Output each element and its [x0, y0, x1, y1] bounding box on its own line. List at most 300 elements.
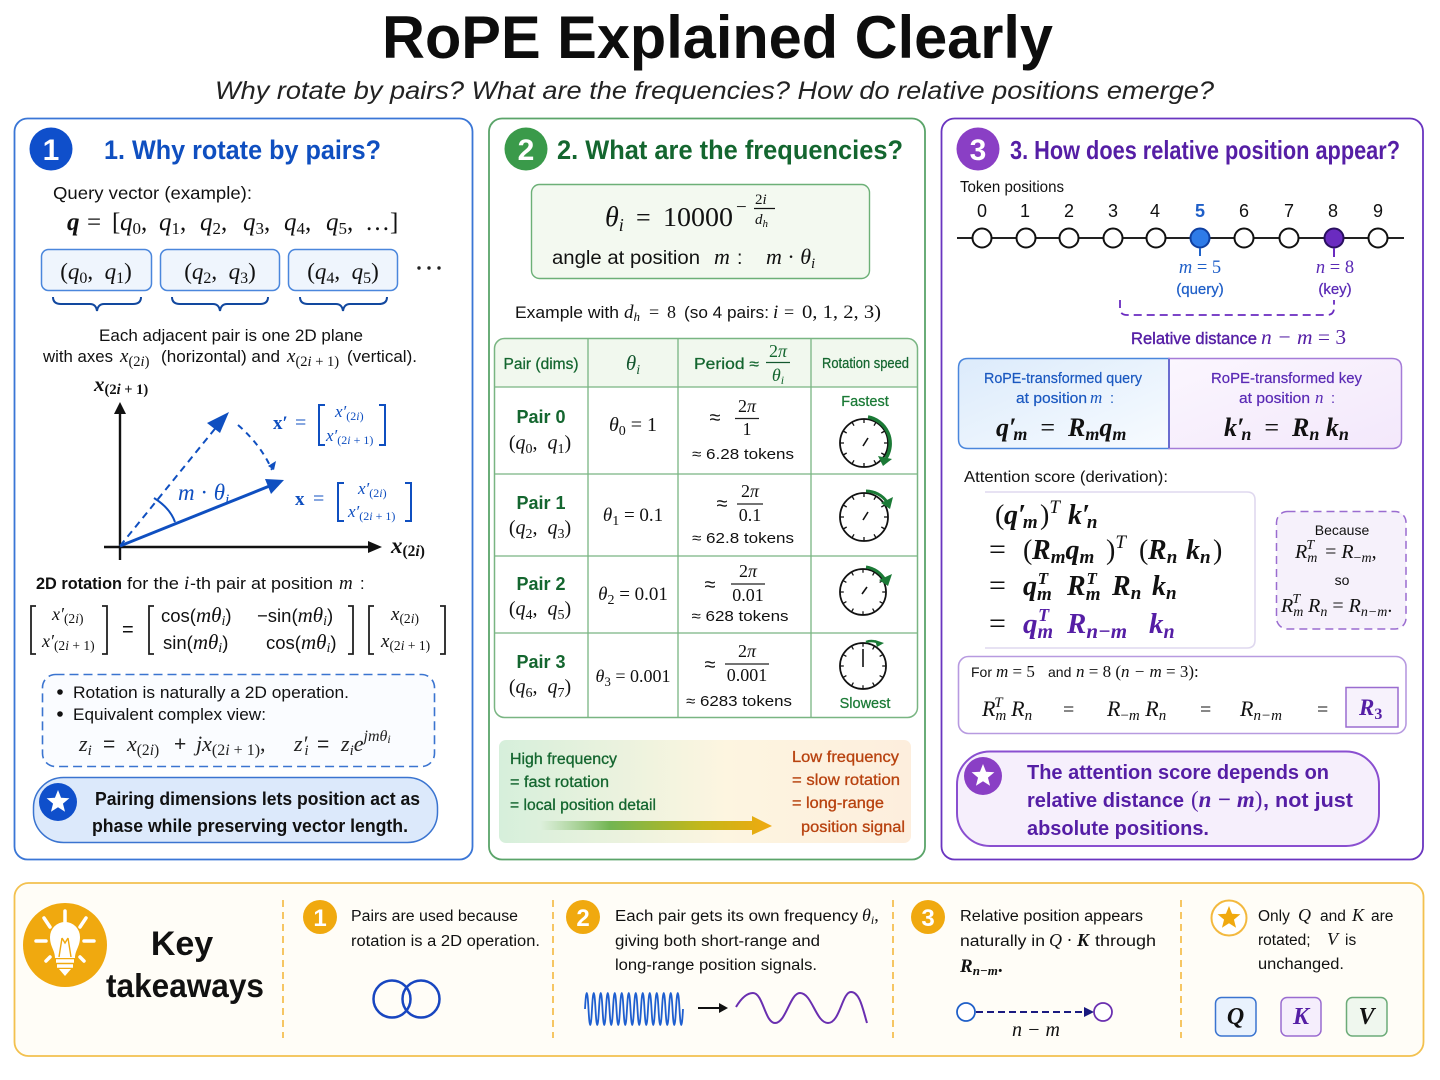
complex view note: , — [260, 731, 266, 756]
row: pair 3: ≈ — [705, 654, 716, 676]
rotation matrix equation: ) — [222, 632, 228, 653]
worked example: n — [1025, 708, 1032, 724]
complex view note — [42, 674, 434, 766]
rotation matrix equation: −sin(mθ — [257, 603, 323, 627]
pair chips: 4 — [326, 270, 334, 287]
row: pair 3: ) — [564, 676, 571, 698]
complex view note: jmθ — [362, 728, 388, 745]
key transform: = — [1251, 413, 1292, 442]
because note: T — [1292, 592, 1301, 607]
axes: (2 — [402, 543, 416, 560]
icon: distance arrow: n − m — [1012, 1019, 1060, 1041]
because note: so — [1335, 572, 1350, 588]
x matrix: i + 1) — [369, 509, 395, 523]
rotation matrix equation: ) — [327, 605, 333, 626]
line 2: m — [1051, 547, 1065, 568]
vector x prime — [120, 412, 229, 546]
frequency formula box: 2i — [755, 192, 767, 208]
row: pair 0: 0 — [619, 424, 626, 439]
key transform: n — [1315, 388, 1324, 407]
frequency formula box: m — [714, 244, 730, 269]
rotation heading: 2D rotation — [36, 575, 122, 593]
line 3: R — [1112, 571, 1131, 602]
because note: m — [1362, 551, 1372, 566]
rotation matrix equation: cos(mθ — [266, 630, 326, 654]
pair chips: q — [229, 259, 240, 284]
line 1: T — [1049, 497, 1061, 518]
icon: clock pair 3 — [840, 640, 886, 689]
example line: h — [634, 309, 640, 324]
pair explanation — [42, 327, 417, 370]
takeaway 4: are — [1371, 908, 1393, 925]
takeaway 3: through — [1095, 933, 1156, 950]
row: pair 3: 3 — [604, 674, 611, 689]
title: RoPE Explained Clearly — [382, 4, 1054, 71]
table header: 2π — [769, 341, 788, 361]
query vector formula: q — [159, 209, 172, 236]
query vector formula: q — [284, 209, 296, 236]
derivation label: Attention score (derivation): — [964, 469, 1168, 486]
because note: R — [1349, 595, 1361, 617]
rotation matrix equation: (2 — [64, 611, 75, 626]
x prime matrix: i + 1) — [347, 433, 373, 447]
complex view note: (2 — [212, 742, 225, 759]
row: pair 0: ≈ 6.28 tokens — [692, 446, 794, 463]
line 1: ( — [995, 500, 1004, 531]
rotation matrix equation: x′ — [42, 631, 54, 651]
row: pair 2: 2π — [739, 561, 758, 581]
number line: 1 — [1020, 201, 1030, 221]
row: pair 3: 2π — [738, 641, 757, 661]
worked example: m — [995, 708, 1006, 724]
query vector formula: …] — [365, 209, 398, 236]
key transform: k — [1319, 413, 1339, 442]
high frequency text: High frequency — [510, 751, 617, 768]
query vector formula — [67, 209, 398, 238]
rotation matrix equation: cos(mθ — [161, 603, 221, 627]
rotation matrix equation: i — [323, 614, 327, 629]
row: pair 1: = 0.1 — [619, 505, 663, 526]
line 3: k — [1152, 571, 1166, 602]
pair chips: (q — [307, 259, 326, 284]
line 3: R — [1067, 571, 1086, 602]
pair explanation: i) — [141, 354, 149, 370]
row: pair 3: 6 — [526, 686, 532, 701]
line 1: m — [1023, 512, 1038, 533]
Q K V chips: K — [1292, 1004, 1311, 1030]
pair explanation: (vertical). — [347, 348, 417, 366]
row: pair 2: ≈ — [705, 574, 716, 596]
query vector formula: 4 — [296, 219, 306, 238]
key transform: R — [1292, 413, 1309, 442]
heading 1: 1. Why rotate by pairs? — [104, 135, 381, 165]
badge 3 — [956, 128, 1000, 170]
line 3: n — [1131, 583, 1141, 604]
line 1: n — [1087, 512, 1097, 533]
axes — [93, 372, 425, 560]
table header — [504, 341, 909, 387]
frequency summary — [499, 740, 911, 843]
callout: attention score: absolute positions. — [1027, 818, 1209, 840]
query marker label: (query) — [1176, 281, 1224, 298]
row: pair 1: θ — [603, 505, 612, 526]
line 4: m — [1038, 621, 1053, 643]
low frequency text: position signal — [801, 819, 905, 836]
row: pair 0 — [509, 394, 889, 463]
complex view note: i — [88, 743, 92, 759]
icon: clock fastest — [840, 417, 892, 467]
row: pair 2: q — [548, 598, 558, 620]
icon: overlapping rings — [374, 980, 440, 1018]
takeaway 3: R — [960, 956, 973, 977]
rotation heading: m — [339, 573, 353, 594]
angle label: m · θ — [178, 480, 225, 505]
row: pair 0: q — [548, 432, 558, 454]
key transform: at position — [1239, 391, 1310, 407]
because note: R — [1303, 595, 1320, 617]
callout: attention score: relative distance — [1027, 790, 1184, 812]
takeaway 4: unchanged. — [1258, 956, 1344, 973]
complex view note: z′ — [294, 731, 307, 756]
row: pair 0: = 1 — [626, 414, 657, 436]
row: pair 1: ) — [564, 517, 571, 539]
query vector label: Query vector (example): — [53, 183, 252, 203]
badge 2 — [504, 128, 548, 170]
line 2: = — [989, 533, 1006, 566]
row: pair 2: , — [532, 598, 548, 620]
table header: Pair (dims) — [504, 356, 578, 373]
line 3: = — [989, 569, 1006, 602]
complex view note: e — [354, 731, 364, 756]
callout: pairing: Pairing dimensions lets position act as — [95, 789, 420, 809]
chart: high to low frequency waves — [585, 992, 867, 1025]
because note: = — [1320, 541, 1341, 563]
key transform: : — [1331, 391, 1335, 407]
query vector formula: 3 — [256, 219, 264, 238]
takeaway 3: Q · — [1049, 930, 1072, 950]
row: pair 1: 2π — [741, 481, 760, 501]
rotation matrix equation: sin(mθ — [163, 630, 218, 654]
callout: attention score: (n − m) — [1191, 787, 1262, 812]
line 2: ( — [1023, 535, 1032, 566]
rotation matrix equation: = — [122, 619, 134, 641]
low frequency text: Low frequency — [792, 749, 899, 766]
query vector formula: , — [180, 209, 186, 236]
pair chips: ) — [124, 259, 132, 284]
row: pair 2 — [509, 561, 788, 625]
takeaway 3: n−m — [973, 963, 998, 978]
line 4: k — [1149, 608, 1164, 640]
number line: 0 — [977, 201, 987, 221]
complex view note: z — [341, 731, 350, 756]
pair chips: (q — [184, 259, 203, 284]
line 1 — [995, 497, 1097, 533]
rotation matrix equation: i) — [75, 611, 83, 626]
takeaway 4: K — [1351, 905, 1365, 925]
frequency table — [494, 338, 918, 718]
x prime matrix: x′ — [273, 413, 288, 434]
line 2: m — [1079, 547, 1094, 568]
badge 2: 2 — [518, 134, 534, 167]
query vector formula: 2 — [212, 219, 221, 238]
takeaway 3: 3 — [921, 905, 935, 932]
example line: d — [624, 302, 634, 323]
takeaway 1: Pairs are used because — [351, 908, 518, 925]
line 2 — [989, 532, 1222, 568]
line 4: = — [989, 607, 1006, 640]
query marker label: m = 5 — [1179, 258, 1221, 278]
rotation matrix equation: (2 — [399, 611, 411, 626]
x prime matrix: x′ — [326, 426, 337, 445]
table header: i — [781, 373, 784, 387]
icon: clock pair 2 — [840, 567, 892, 615]
gradient arrow — [540, 816, 772, 835]
callout: pairing — [34, 778, 438, 842]
line 2: k — [1186, 535, 1200, 566]
because note: n−m — [1361, 605, 1387, 620]
because note: n — [1320, 605, 1327, 620]
x prime matrix: x′ — [335, 402, 346, 421]
pair explanation: (2 — [128, 354, 141, 370]
row: pair 1: 2 — [526, 527, 532, 542]
takeaway 2: θ — [862, 905, 871, 925]
query vector formula: q — [67, 209, 80, 236]
relative distance label: Relative distance — [1131, 330, 1257, 348]
because note: R — [1295, 541, 1307, 563]
takeaway 2: Each pair gets its own frequency — [615, 908, 858, 925]
pair chips: , — [211, 259, 229, 284]
row: pair 3: , — [532, 676, 548, 698]
complex view note: Equivalent complex view: — [73, 706, 266, 724]
line 3 — [989, 569, 1177, 605]
takeaway 1 — [303, 900, 540, 1018]
row: pair 0: ≈ — [710, 407, 721, 429]
row: pair 2: 2 — [607, 593, 614, 608]
derivation box — [985, 492, 1255, 648]
takeaway 2: 2 — [576, 905, 590, 932]
worked example: and — [1048, 664, 1071, 680]
panel: frequencies — [489, 118, 925, 860]
query transform: R — [1068, 413, 1085, 442]
query transform: = — [1027, 413, 1068, 442]
takeaway 4: and — [1320, 908, 1346, 925]
row: pair 0: Pair 0 — [516, 407, 566, 427]
row: pair 3: Pair 3 — [516, 652, 566, 672]
takeaway 4: V — [1327, 929, 1340, 949]
row: pair 3: 0.001 — [727, 665, 767, 685]
line 4: n−m — [1086, 619, 1127, 643]
takeaway 2 — [566, 900, 879, 1025]
takeaway 4: rotated; — [1258, 932, 1311, 949]
worked example — [958, 656, 1406, 734]
line 3: T — [1086, 569, 1097, 588]
row: pair 0: 1 — [558, 442, 564, 457]
frequency formula box: θ — [605, 202, 619, 233]
rotation heading: : — [360, 575, 365, 593]
line 2: ) — [1213, 535, 1222, 566]
because note: T — [1306, 538, 1315, 553]
pair explanation: i + 1) — [308, 354, 339, 370]
number line: 6 — [1239, 201, 1249, 221]
line 3: m — [1086, 584, 1100, 605]
token positions label: Token positions — [960, 179, 1064, 196]
badge 1 — [30, 128, 72, 170]
x prime matrix: = — [295, 412, 306, 434]
badge 3: 3 — [970, 134, 986, 167]
query transform: m — [1090, 388, 1102, 407]
complex view note: (2 — [137, 742, 150, 759]
frequency formula box: d — [755, 212, 762, 228]
line 4 — [989, 605, 1175, 643]
callout: attention score: The attention score depends on — [1027, 762, 1329, 784]
takeaway 2: long-range position signals. — [615, 957, 817, 974]
example line: = — [784, 302, 794, 322]
query transform: m — [1013, 424, 1027, 444]
axes: i) — [415, 543, 425, 560]
complex view note: i + 1) — [225, 742, 260, 759]
row: pair 2: Pair 2 — [516, 574, 566, 594]
callout: attention score: , not just — [1263, 790, 1353, 812]
row: pair 2: 4 — [526, 608, 532, 623]
number line — [957, 201, 1404, 257]
frequency formula box: 10000 — [663, 202, 733, 232]
key transform: n — [1241, 424, 1251, 444]
low frequency text — [792, 749, 905, 836]
number line: 9 — [1373, 201, 1383, 221]
line 3: T — [1038, 569, 1049, 588]
panel: why rotate by pairs — [14, 118, 472, 860]
worked example: n = 8 (n − m = 3): — [1076, 662, 1199, 681]
query vector formula: 5 — [338, 219, 347, 238]
line 4: n — [1164, 621, 1175, 643]
line 4: q — [1023, 608, 1038, 640]
rotation matrix equation: i + 1) — [65, 638, 95, 653]
frequency formula box: : — [737, 247, 742, 269]
worked example: = — [1200, 699, 1211, 721]
panel: relative position — [942, 118, 1423, 860]
takeaway 2: , — [874, 905, 879, 925]
rotation heading: -th pair at position — [190, 575, 333, 593]
worked example: n−m — [1253, 708, 1282, 724]
row: pair 1: ≈ 62.8 tokens — [692, 530, 794, 547]
query vector formula: 1 — [172, 219, 180, 238]
query transform: q′ — [996, 413, 1016, 442]
key takeaways heading — [106, 925, 264, 1004]
line 1: ) — [1040, 500, 1049, 531]
key takeaways heading: takeaways — [106, 967, 264, 1004]
takeaway 4: Q — [1298, 905, 1311, 925]
line 2: R — [1148, 535, 1167, 566]
axes: x — [391, 533, 402, 558]
line 1: q′ — [1004, 500, 1026, 531]
frequency formula box: m · θ — [766, 244, 811, 269]
row: pair 3: q — [548, 676, 558, 698]
row: pair 0: 0 — [526, 442, 532, 457]
because note: , — [1372, 541, 1377, 563]
query vector formula: [ — [112, 209, 120, 236]
frequency formula box: i — [619, 215, 624, 235]
row: pair 3: θ — [596, 666, 604, 686]
number line: 3 — [1108, 201, 1118, 221]
key takeaways heading: Key — [151, 925, 213, 963]
x prime matrix: (2 — [346, 409, 356, 423]
number line: 2 — [1064, 201, 1074, 221]
x matrix: (2 — [359, 509, 369, 523]
row: pair 0: 1 — [742, 419, 752, 439]
rotation matrix equation — [31, 603, 445, 656]
row: pair 0: , — [532, 432, 548, 454]
rotation matrix equation: ) — [330, 632, 336, 653]
pair chips — [42, 250, 441, 290]
distance bracket — [1120, 300, 1334, 315]
callout: attention score — [957, 752, 1379, 846]
rotation matrix equation: i) — [411, 611, 419, 626]
complex view note: = — [103, 733, 115, 756]
rotation matrix equation: ) — [225, 605, 232, 626]
takeaway 1: 1 — [313, 905, 327, 932]
row: pair 1: 3 — [558, 527, 564, 542]
takeaway 3: Relative position appears — [960, 908, 1143, 925]
row: pair 2: θ — [598, 584, 607, 605]
number line: 5 — [1195, 201, 1205, 221]
worked example: n — [1159, 708, 1166, 724]
worked example: R — [1140, 696, 1159, 721]
row: pair 0: (q — [509, 432, 526, 454]
line 2: n — [1167, 547, 1177, 568]
complex view note: i) — [150, 742, 159, 759]
rotation arc — [154, 425, 276, 522]
pair chips: q — [352, 259, 363, 284]
table header: θ — [626, 351, 636, 375]
high frequency text — [510, 751, 656, 814]
R3 result: 3 — [1374, 706, 1382, 723]
takeaway 3: naturally in — [960, 933, 1045, 950]
subtitle: Why rotate by pairs? What are the frequencies? How do relative positions emerge? — [215, 77, 1214, 105]
pair chips: , — [334, 259, 352, 284]
example line: 8 — [667, 302, 676, 322]
table header: Rotation speed — [822, 356, 909, 372]
row: pair 1: 0.1 — [739, 505, 761, 525]
rotation matrix equation: (2 — [54, 638, 65, 653]
heading 2: 2. What are the frequencies? — [557, 135, 903, 165]
row: pair 1 — [509, 481, 794, 547]
rotation heading — [36, 573, 365, 594]
pair explanation: Each adjacent pair is one 2D plane — [99, 327, 363, 345]
panel: key takeaways — [14, 883, 1424, 1056]
Q K V chips: V — [1358, 1004, 1376, 1030]
axes: x — [94, 372, 104, 396]
query vector formula: , — [141, 209, 147, 236]
pair chips: ) — [248, 259, 256, 284]
line 2: q — [1065, 535, 1079, 566]
because note — [1276, 512, 1406, 629]
table grid — [494, 338, 918, 718]
x matrix: x′ — [348, 502, 359, 521]
row: pair 3: Slowest — [840, 696, 890, 712]
example line: i — [773, 302, 778, 323]
badge 1: 1 — [43, 134, 59, 167]
pair chips: 3 — [240, 270, 248, 287]
line 4: R — [1067, 608, 1086, 640]
because note: R — [1341, 541, 1354, 563]
worked example: R — [982, 696, 995, 721]
pair explanation: (2 — [295, 354, 308, 370]
frequency formula box — [532, 184, 870, 278]
rotation matrix equation: x — [381, 631, 389, 652]
pair explanation: x — [120, 346, 128, 367]
row: pair 2: = 0.01 — [614, 584, 668, 605]
line 3: m — [1037, 584, 1052, 605]
